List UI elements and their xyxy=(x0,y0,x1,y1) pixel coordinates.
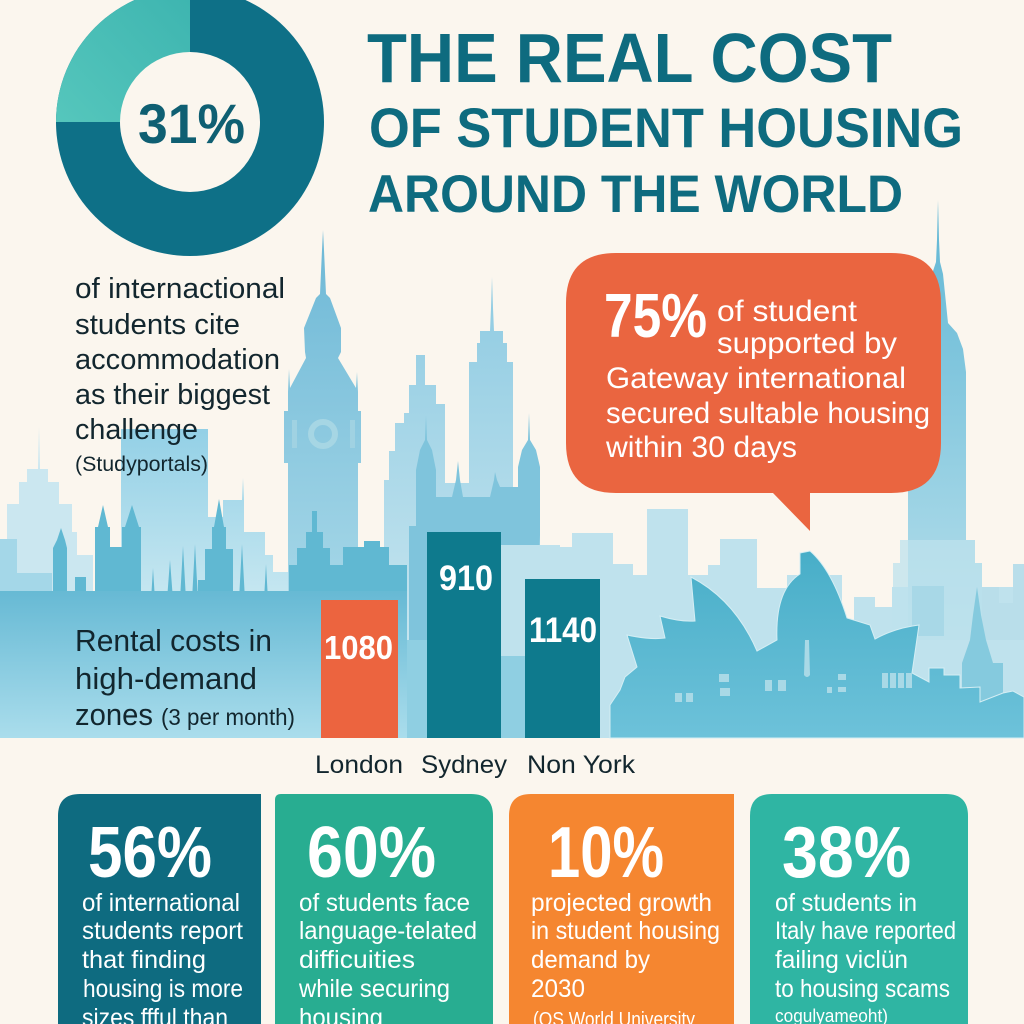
card: 38% xyxy=(750,794,968,1024)
text block: 31% description: challenge xyxy=(75,414,198,446)
card: 60%: while securing xyxy=(298,975,450,1003)
bubble text xyxy=(604,282,930,464)
shaded block behind opera house xyxy=(912,586,944,636)
bar: Sydney: 910 xyxy=(439,559,493,598)
westminster towers xyxy=(409,413,540,660)
card: 38%: failing viclün xyxy=(775,946,908,974)
donut value: 31% xyxy=(138,92,245,155)
text block: 31% description xyxy=(75,273,285,476)
text block: 31% description: students cite xyxy=(75,309,240,341)
bubble text: Gateway international xyxy=(606,362,906,395)
ground band xyxy=(0,591,407,738)
text block: 31% description: of internactional xyxy=(75,273,285,305)
opera house windows xyxy=(675,640,912,702)
bar: Sydney xyxy=(427,532,501,738)
bar labels: London xyxy=(315,751,403,779)
callout bubble: 75% xyxy=(566,253,941,531)
bubble text: supported by xyxy=(717,327,897,360)
bar chart: rental costs xyxy=(315,532,636,779)
donut chart xyxy=(56,0,324,256)
card: 56%: housing is more xyxy=(83,975,243,1003)
card: 60%: 60% xyxy=(307,813,436,893)
tall tower right xyxy=(900,200,982,640)
bar labels xyxy=(315,751,636,779)
pale stepped tower xyxy=(384,277,540,640)
card: 60%: of students face xyxy=(299,889,470,917)
text block: 31% description: accommodation xyxy=(75,344,280,376)
pale big building xyxy=(121,429,289,592)
donut light segment 31% xyxy=(56,0,190,122)
card: 60%: language-telated xyxy=(299,917,477,945)
bar: New York xyxy=(525,579,600,738)
rental costs label: zones xyxy=(75,697,153,732)
bar: London: 1080 xyxy=(324,629,393,666)
bar: London xyxy=(321,600,398,738)
title: AROUND THE WORLD xyxy=(368,165,903,224)
rental costs label xyxy=(75,623,295,732)
card: 56%: 56% xyxy=(88,813,212,893)
bubble text: of student xyxy=(717,295,858,328)
pale block far left xyxy=(0,539,52,592)
card: 56%: that finding xyxy=(82,946,206,974)
skyline illustration xyxy=(0,200,1024,738)
card: 10%: projected growth xyxy=(531,889,712,917)
bubble shape xyxy=(566,253,941,531)
card: 38%: 38% xyxy=(782,813,911,893)
pale back skyline: right xyxy=(501,509,1024,738)
big ben clock face xyxy=(292,420,355,448)
title: THE REAL COST xyxy=(367,19,892,97)
card: 56% xyxy=(58,794,261,1024)
text block: 31% description: as their biggest xyxy=(75,379,270,411)
donut dark segment 69% xyxy=(56,0,324,256)
card: 10%: 10% xyxy=(548,813,664,893)
card: 56%: of international xyxy=(82,889,240,917)
rental costs label: high-demand xyxy=(75,661,257,696)
card: 38%: to housing scams xyxy=(775,975,950,1003)
card: 60%: difficuities xyxy=(299,946,415,974)
bubble text: secured sultable housing xyxy=(606,397,930,430)
card: 10%: in student housing xyxy=(531,917,720,945)
card: 60% xyxy=(275,794,493,1024)
card: 10%: 2030 xyxy=(531,975,585,1003)
card: 56%: students report xyxy=(82,917,243,945)
pale back skyline: left xyxy=(0,427,93,592)
big ben tower xyxy=(284,230,361,600)
text block: 31% description: (Studyportals) xyxy=(75,453,208,476)
card: 38%: of students in xyxy=(775,889,917,917)
card: 38%: Italy have reported xyxy=(775,917,956,945)
rental costs label: (3 per month) xyxy=(161,704,295,730)
sydney opera house xyxy=(610,551,1024,738)
mid fill behind bars xyxy=(407,640,525,738)
tall tower lower steps xyxy=(892,540,982,640)
title: OF STUDENT HOUSING xyxy=(369,96,963,159)
bar: New York: 1140 xyxy=(529,611,597,650)
donut hole xyxy=(120,52,260,192)
bubble text: 75% xyxy=(604,282,707,351)
rental costs label: Rental costs in xyxy=(75,623,272,658)
mid skyline: left towers xyxy=(53,499,268,600)
card: 10% xyxy=(509,794,734,1024)
bar labels: Non York xyxy=(527,751,636,779)
title xyxy=(367,19,963,224)
right small tower xyxy=(962,587,1003,702)
bubble text: within 30 days xyxy=(605,431,797,464)
bar labels: Sydney xyxy=(421,751,508,779)
card: 10%: demand by xyxy=(531,946,650,974)
